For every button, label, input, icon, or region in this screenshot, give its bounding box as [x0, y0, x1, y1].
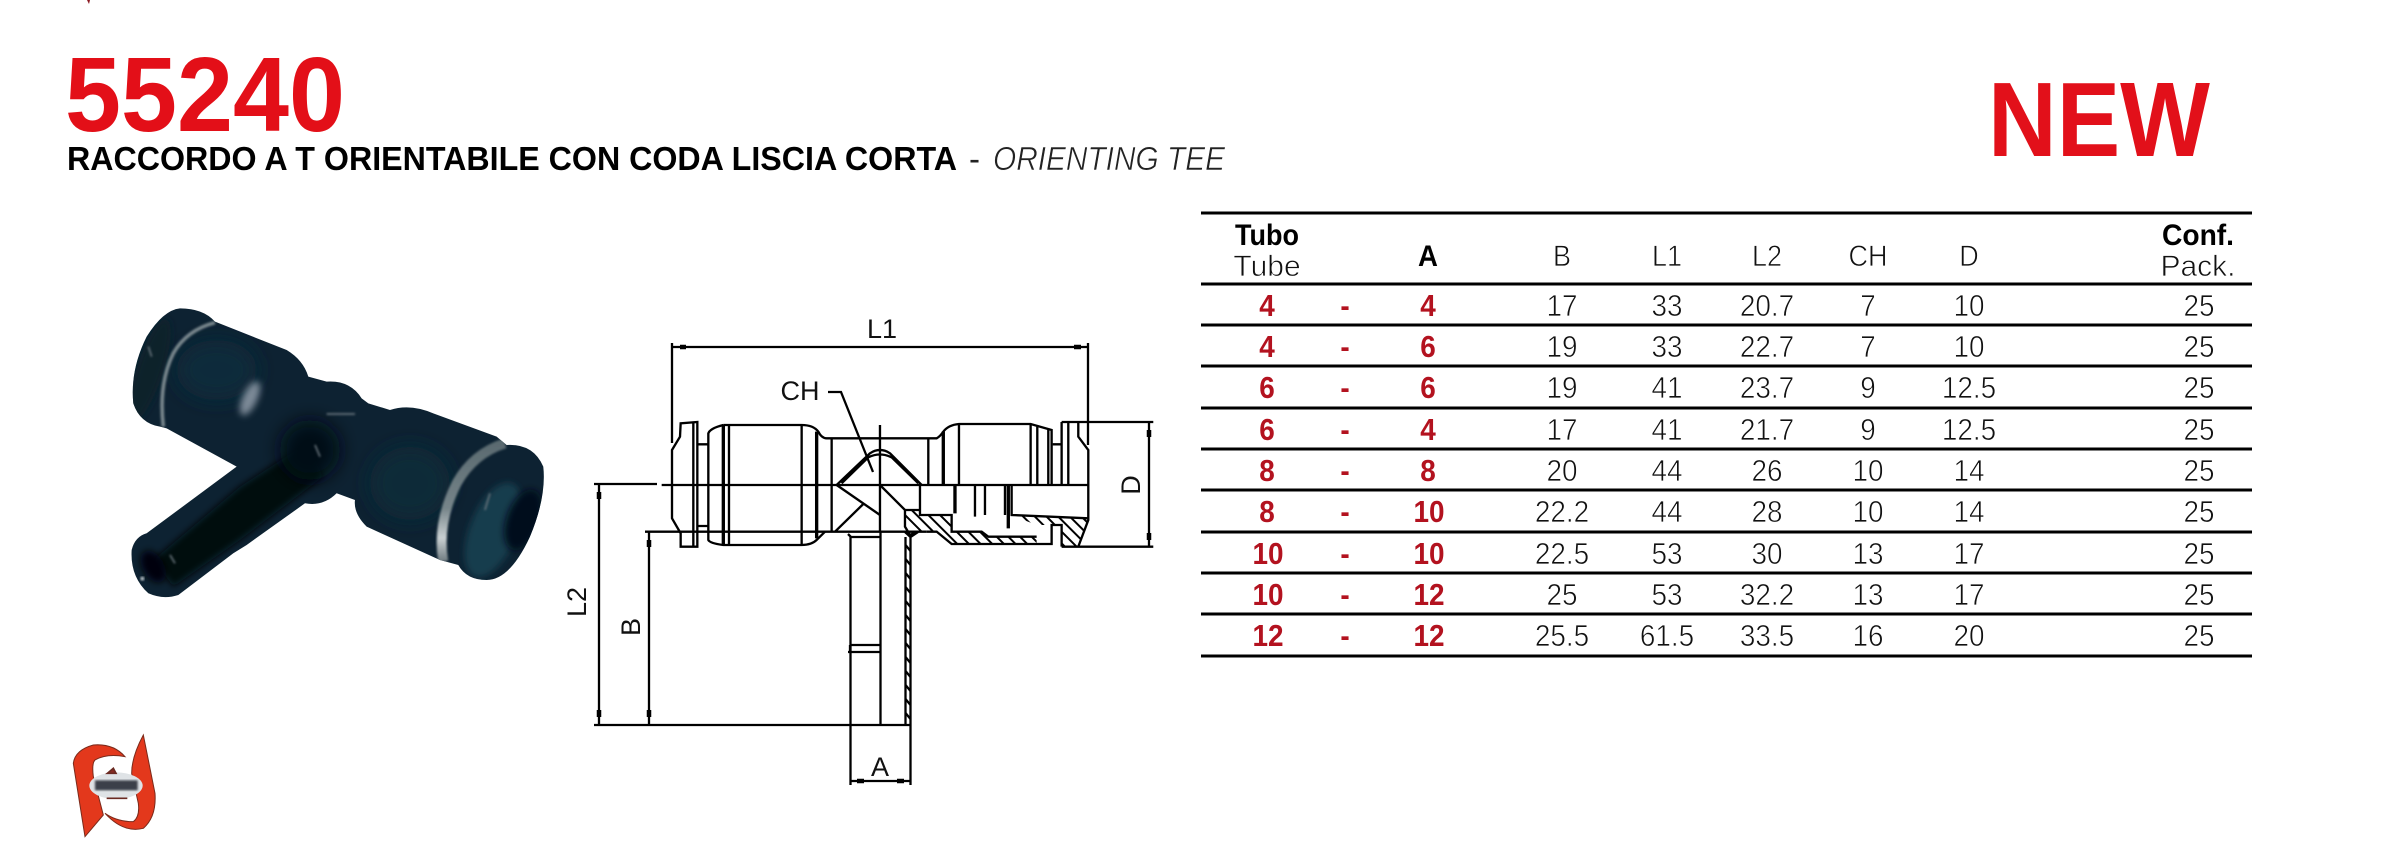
- row 8-10: 25: [2183, 495, 2215, 529]
- row 12-12: 16: [1852, 619, 1884, 653]
- row 4-6: 25: [2183, 330, 2215, 364]
- row 10-10: 22.5: [1535, 537, 1589, 571]
- row 10-10: 53: [1651, 537, 1683, 571]
- table rules: [1201, 213, 2252, 656]
- row 8-8: 26: [1751, 454, 1783, 488]
- table header: L1: [1652, 240, 1682, 273]
- row 10-10: -: [1340, 537, 1350, 571]
- tail of the tee: [848, 532, 918, 725]
- heading: product name: ORIENTING TEE: [993, 140, 1226, 177]
- row 6-6: 6: [1420, 371, 1436, 405]
- row 4-4: -: [1340, 289, 1350, 323]
- row 8-10: [1259, 495, 2215, 529]
- row 8-10: -: [1340, 495, 1350, 529]
- row 12-12: 12: [1252, 619, 1284, 653]
- row 6-6: 41: [1651, 371, 1683, 405]
- dimension labels: L1: [867, 314, 897, 344]
- row 8-10: 22.2: [1535, 495, 1589, 529]
- row 4-6: 19: [1546, 330, 1578, 364]
- row 4-6: -: [1340, 330, 1350, 364]
- row 4-4: 4: [1420, 289, 1436, 323]
- row 4-4: 17: [1546, 289, 1578, 323]
- row 10-12: 10: [1252, 578, 1284, 612]
- row 10-12: 17: [1953, 578, 1985, 612]
- row 6-6: [1259, 371, 2215, 405]
- corner mark: [87, 0, 90, 4]
- row 4-6: 7: [1860, 330, 1876, 364]
- dimension labels: A: [871, 752, 889, 782]
- row 6-6: -: [1340, 371, 1350, 405]
- row 10-12: -: [1340, 578, 1350, 612]
- row 10-10: 30: [1751, 537, 1783, 571]
- dimension labels: [562, 314, 1146, 782]
- row 10-10: 10: [1252, 537, 1284, 571]
- row 6-6: 25: [2183, 371, 2215, 405]
- row 4-6: 22.7: [1740, 330, 1794, 364]
- row 6-6: 6: [1259, 371, 1275, 405]
- badge: NEW: NEW: [1988, 61, 2210, 179]
- row 8-10: 10: [1413, 495, 1445, 529]
- row 10-12: 53: [1651, 578, 1683, 612]
- row 6-4: 21.7: [1740, 413, 1794, 447]
- row 4-6: 6: [1420, 330, 1436, 364]
- dimension labels: B: [616, 618, 646, 636]
- row 10-10: 25: [2183, 537, 2215, 571]
- row 12-12: -: [1340, 619, 1350, 653]
- fitting outline and section: [645, 422, 1153, 547]
- row 12-12: 61.5: [1640, 619, 1694, 653]
- row 6-4: 4: [1420, 413, 1436, 447]
- row 10-10: [1252, 537, 2215, 571]
- product photo: black tee fitting: [121, 308, 550, 597]
- row 8-8: 20: [1546, 454, 1578, 488]
- heading: product code: 55240: [65, 36, 345, 154]
- heading: product name: -: [969, 140, 980, 177]
- row 10-12: 32.2: [1740, 578, 1794, 612]
- row 6-4: -: [1340, 413, 1350, 447]
- row 4-4: 4: [1259, 289, 1275, 323]
- row 8-8: 14: [1953, 454, 1985, 488]
- row 4-6: 4: [1259, 330, 1275, 364]
- table header: CH: [1849, 240, 1887, 273]
- row 6-4: 17: [1546, 413, 1578, 447]
- row 10-12: 12: [1413, 578, 1445, 612]
- row 4-4: [1259, 289, 2215, 323]
- row 10-10: 17: [1953, 537, 1985, 571]
- row 12-12: 12: [1413, 619, 1445, 653]
- row 12-12: [1252, 619, 2215, 653]
- row 10-10: 10: [1413, 537, 1445, 571]
- row 4-6: [1259, 330, 2215, 364]
- row 6-6: 12.5: [1942, 371, 1996, 405]
- row 8-10: 14: [1953, 495, 1985, 529]
- row 6-4: 6: [1259, 413, 1275, 447]
- row 12-12: 20: [1953, 619, 1985, 653]
- row 6-6: 9: [1860, 371, 1876, 405]
- table header: D: [1959, 240, 1979, 273]
- table header: Tube: [1233, 250, 1301, 283]
- logo: [73, 735, 155, 837]
- dimension labels: CH: [780, 376, 820, 406]
- table header: Pack.: [2160, 250, 2236, 283]
- heading: product name: RACCORDO A T ORIENTABILE CON CODA LISCIA CORTA: [67, 140, 957, 177]
- row 6-6: 19: [1546, 371, 1578, 405]
- technical drawing: tee fitting with section: [562, 314, 1153, 785]
- dimension labels: D: [1116, 475, 1146, 495]
- row 8-10: 44: [1651, 495, 1683, 529]
- table header: B: [1553, 240, 1571, 273]
- dimension labels: L2: [562, 587, 592, 617]
- row 4-6: 33: [1651, 330, 1683, 364]
- table header: Tubo: [1235, 219, 1299, 252]
- row 4-6: 10: [1953, 330, 1985, 364]
- row 8-8: 44: [1651, 454, 1683, 488]
- row 12-12: 25: [2183, 619, 2215, 653]
- row 6-4: 9: [1860, 413, 1876, 447]
- row 12-12: 33.5: [1740, 619, 1794, 653]
- row 8-8: [1259, 454, 2215, 488]
- row 8-10: 8: [1259, 495, 1275, 529]
- row 6-6: 23.7: [1740, 371, 1794, 405]
- row 6-4: 41: [1651, 413, 1683, 447]
- row 10-12: 13: [1852, 578, 1884, 612]
- row 10-10: 13: [1852, 537, 1884, 571]
- row 6-4: 25: [2183, 413, 2215, 447]
- table header: A: [1418, 240, 1438, 273]
- row 10-12: 25: [1546, 578, 1578, 612]
- table header: Conf.: [2162, 219, 2234, 252]
- row 4-4: 7: [1860, 289, 1876, 323]
- row 4-4: 33: [1651, 289, 1683, 323]
- row 8-8: 8: [1420, 454, 1436, 488]
- row 4-4: 20.7: [1740, 289, 1794, 323]
- row 8-8: 25: [2183, 454, 2215, 488]
- row 12-12: 25.5: [1535, 619, 1589, 653]
- row 10-12: 25: [2183, 578, 2215, 612]
- row 4-4: 10: [1953, 289, 1985, 323]
- table header: [1233, 219, 2236, 283]
- row 4-4: 25: [2183, 289, 2215, 323]
- row 10-12: [1252, 578, 2215, 612]
- dimension lines: [594, 343, 1149, 785]
- row 6-4: 12.5: [1942, 413, 1996, 447]
- table rows: [1252, 289, 2215, 653]
- row 8-10: 10: [1852, 495, 1884, 529]
- table header: L2: [1752, 240, 1782, 273]
- row 8-10: 28: [1751, 495, 1783, 529]
- row 8-8: 8: [1259, 454, 1275, 488]
- row 8-8: 10: [1852, 454, 1884, 488]
- row 8-8: -: [1340, 454, 1350, 488]
- table: dimensions: [1201, 213, 2252, 656]
- row 6-4: [1259, 413, 2215, 447]
